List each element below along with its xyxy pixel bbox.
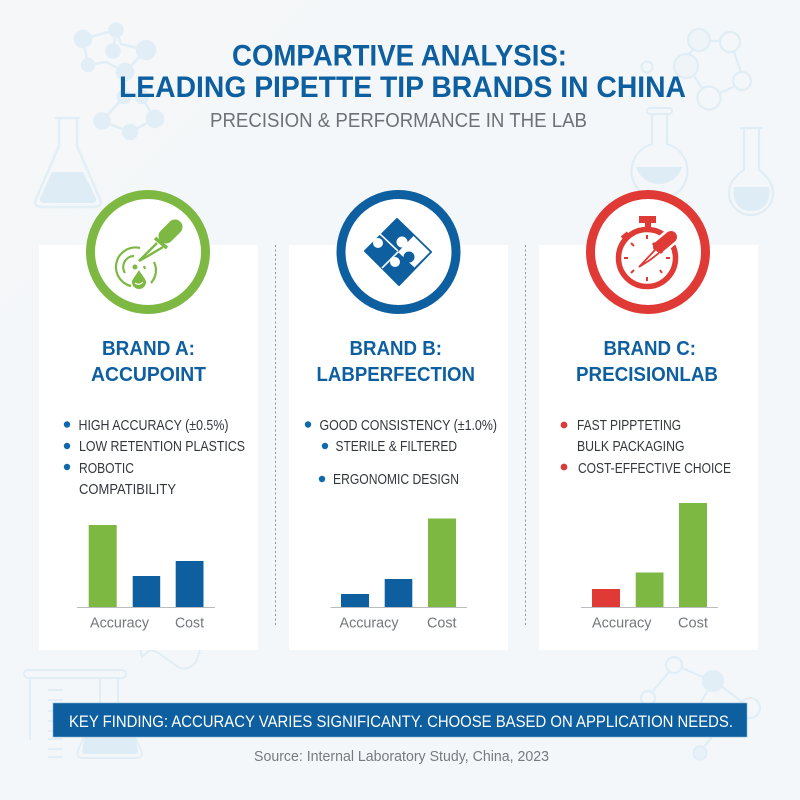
bar chart: Brand C: Cost xyxy=(678,616,708,632)
list: Brand A features: LOW RETENTION PLASTICS xyxy=(79,439,245,455)
panel: Brand B xyxy=(289,194,508,650)
list: Brand A features: COMPATIBILITY xyxy=(79,482,176,498)
background: small flask xyxy=(729,128,773,215)
panel: Brand C xyxy=(539,194,758,650)
bar chart: Brand A: Accuracy xyxy=(90,616,150,632)
list: Brand B features: ERGONOMIC DESIGN xyxy=(333,472,459,488)
background: round flask xyxy=(632,108,688,199)
icon: red stopwatch badge xyxy=(590,194,706,310)
bar chart: Brand C: Accuracy xyxy=(592,616,652,632)
key finding banner xyxy=(53,703,747,737)
background: molecule top left xyxy=(75,24,163,139)
list: Brand A features xyxy=(64,418,245,498)
list: Brand B features xyxy=(305,418,497,488)
icon: blue puzzle badge xyxy=(341,194,456,310)
background: rack and beaker bottom left xyxy=(24,670,142,758)
list: Brand C features: COST-EFFECTIVE CHOICE xyxy=(578,461,731,477)
heading: Brand B xyxy=(316,337,475,386)
subtitle: PRECISION & PERFORMANCE IN THE LAB xyxy=(210,110,587,132)
heading: Brand C xyxy=(576,337,718,386)
icon: green pipette badge xyxy=(90,194,206,310)
bar chart: Brand A: Cost xyxy=(175,616,204,632)
list: Brand C features xyxy=(561,418,731,477)
bar chart: Brand B: Accuracy xyxy=(340,616,399,632)
bar chart: Brand B: Cost xyxy=(427,616,456,632)
heading: Brand B: BRAND B: xyxy=(350,337,442,360)
heading: Brand C: BRAND C: xyxy=(604,337,696,360)
title: LEADING PIPETTE TIP BRANDS IN CHINA xyxy=(119,71,686,104)
source note: Source: Internal Laboratory Study, China, 2023 xyxy=(254,749,549,765)
panel: Brand A xyxy=(39,194,258,650)
bar chart: Brand B xyxy=(330,518,467,632)
list: Brand B features: GOOD CONSISTENCY (±1.0%) xyxy=(320,418,497,434)
list: Brand A features: HIGH ACCURACY (±0.5%) xyxy=(78,418,228,434)
list: Brand A features: ROBOTIC xyxy=(79,461,134,477)
title: COMPARTIVE ANALYSIS: xyxy=(232,40,567,72)
background: molecule top right xyxy=(642,29,751,110)
heading: Brand A xyxy=(91,337,206,386)
background: faint shape under first card xyxy=(140,650,200,669)
heading: Brand C: PRECISIONLAB xyxy=(576,363,718,386)
list: Brand B features: STERILE & FILTERED xyxy=(336,439,457,455)
background: molecule bottom right xyxy=(641,657,760,760)
heading: Brand B: LABPERFECTION xyxy=(316,363,475,386)
list: Brand C features: BULK PACKAGING xyxy=(577,439,684,455)
title xyxy=(119,40,686,104)
bar chart: Brand C xyxy=(581,503,718,632)
bar chart: Brand A xyxy=(77,525,215,632)
background: conical flask xyxy=(35,118,101,207)
heading: Brand A: BRAND A: xyxy=(102,337,195,360)
list: Brand C features: FAST PIPPTETING xyxy=(577,418,681,434)
heading: Brand A: ACCUPOINT xyxy=(91,363,206,386)
